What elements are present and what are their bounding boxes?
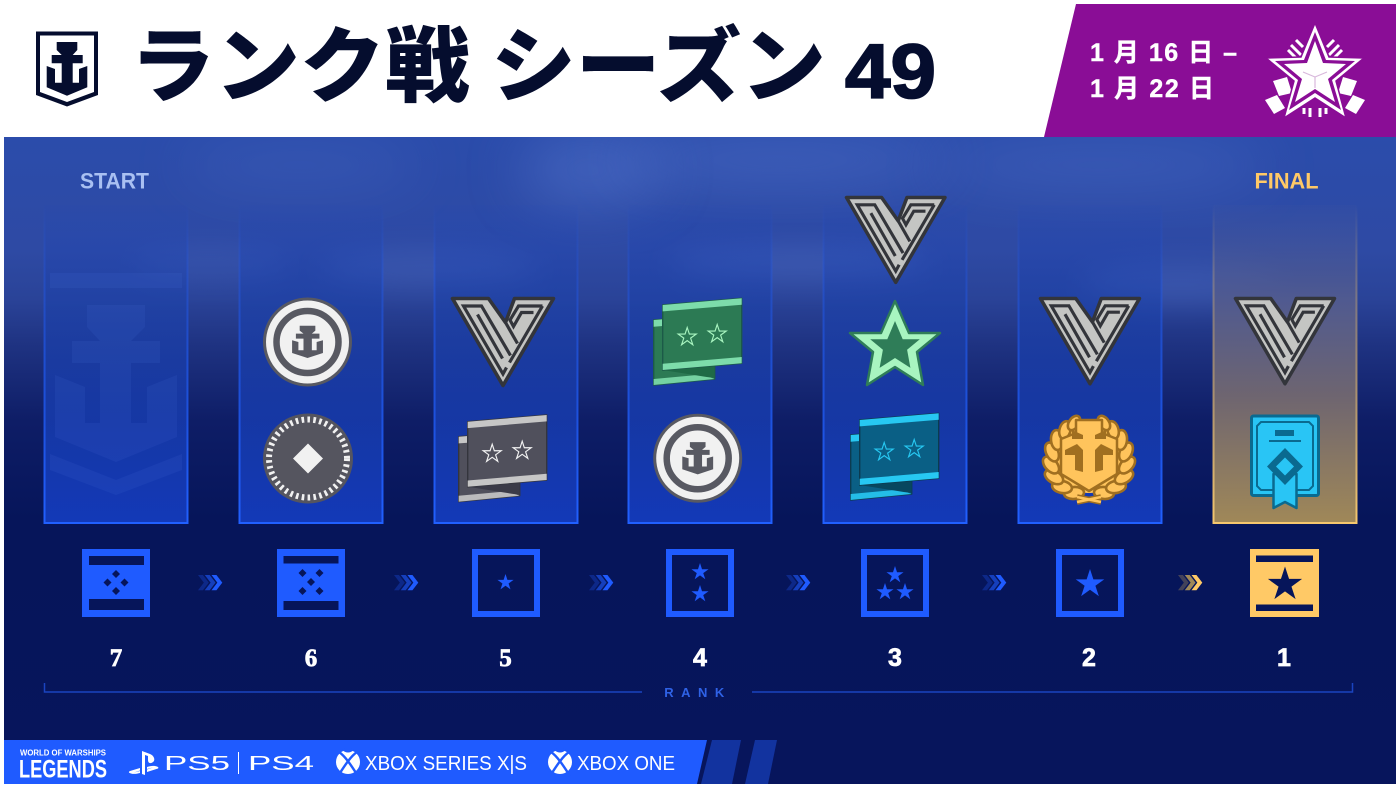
badge: rank 6 (277, 549, 345, 617)
panel: rank 1 final column (1214, 205, 1356, 523)
panel: rank 7 column (44, 205, 188, 523)
game logo (19, 748, 107, 784)
icon: season star emblem (1265, 23, 1365, 118)
panel: rank 5 column (434, 205, 578, 523)
rank badges row (82, 549, 1319, 617)
icon: silver V insignia (846, 198, 945, 282)
rank numbers: 2 (1082, 644, 1096, 672)
icon: grey ribbon with two stars (459, 415, 547, 502)
arrow: 7 to 6 (198, 575, 222, 590)
icon: anchor coin (264, 299, 350, 385)
icon: Xbox (336, 748, 360, 776)
title number: 49: 49 (845, 29, 936, 115)
date text (1090, 39, 1237, 103)
heading: FINAL: FINAL (1254, 168, 1319, 194)
icon: cyan certificate (1252, 416, 1318, 508)
badge: rank 4 (669, 552, 731, 614)
rank numbers: 4 (693, 644, 707, 672)
date text: 1 月 22 日 (1090, 75, 1214, 103)
rank numbers (110, 644, 1291, 672)
panel: rank 2 column (1018, 205, 1162, 523)
rank numbers: 1 (1277, 644, 1291, 672)
panel: rank 6 column (240, 205, 382, 523)
icon: shield logo (36, 32, 98, 106)
icon: cyan ribbon with two stars (851, 413, 939, 500)
icon: Xbox (548, 748, 572, 776)
watermark shield (50, 273, 182, 495)
game logo: LEGENDS (19, 756, 107, 784)
arrow: 2 to 1 (1178, 575, 1202, 590)
date text: 1 月 16 日 – (1090, 39, 1237, 67)
panel: rank 4 column (628, 205, 772, 523)
rank numbers: 5 (499, 645, 512, 672)
platform text: PS5 PS4 (164, 752, 314, 775)
header: title (36, 0, 936, 119)
icon: silver V insignia (452, 298, 554, 386)
rank numbers: 6 (305, 645, 317, 672)
arrow: 5 to 4 (589, 575, 613, 590)
heading: START: START (80, 168, 149, 194)
arrow: 6 to 5 (394, 575, 418, 590)
title text: シーズン: シーズン (491, 0, 826, 119)
platform text: PS5 PS4: PS5 (164, 753, 230, 775)
badge: rank 1 (1250, 549, 1319, 617)
icon: anchor coin (655, 415, 741, 501)
icon: golden laurel shield (1040, 414, 1138, 502)
rank numbers: 7 (110, 645, 122, 672)
rank numbers: 3 (888, 644, 902, 672)
icon: silver V insignia (1040, 298, 1139, 384)
game logo: WORLD OF WARSHIPS (20, 748, 107, 758)
title text: ランク戦: ランク戦 (130, 0, 470, 119)
footer platforms bar (4, 740, 777, 784)
badge: rank 7 (82, 549, 150, 617)
badge: rank 5 (475, 552, 537, 614)
rank label: RANK (664, 685, 732, 700)
badge: rank 3 (864, 552, 926, 614)
badge: rank 2 (1059, 552, 1121, 614)
rank axis (44, 683, 1352, 700)
icon: green star (850, 301, 940, 385)
arrow: 4 to 3 (786, 575, 810, 590)
icon: green ribbon with two stars (654, 298, 742, 385)
platform text: PS5 PS4: PS4 (248, 753, 314, 775)
icon: diamond coin (263, 414, 353, 504)
platform text: Xbox One: XBOX ONE (577, 752, 675, 775)
platform text: Xbox Series: XBOX SERIES X|S (365, 752, 527, 775)
icon: silver V insignia (1236, 298, 1334, 384)
panel: rank 3 column (824, 198, 966, 523)
date banner (1044, 4, 1396, 137)
arrow: 3 to 2 (982, 575, 1006, 590)
icon: PlayStation (129, 751, 158, 775)
